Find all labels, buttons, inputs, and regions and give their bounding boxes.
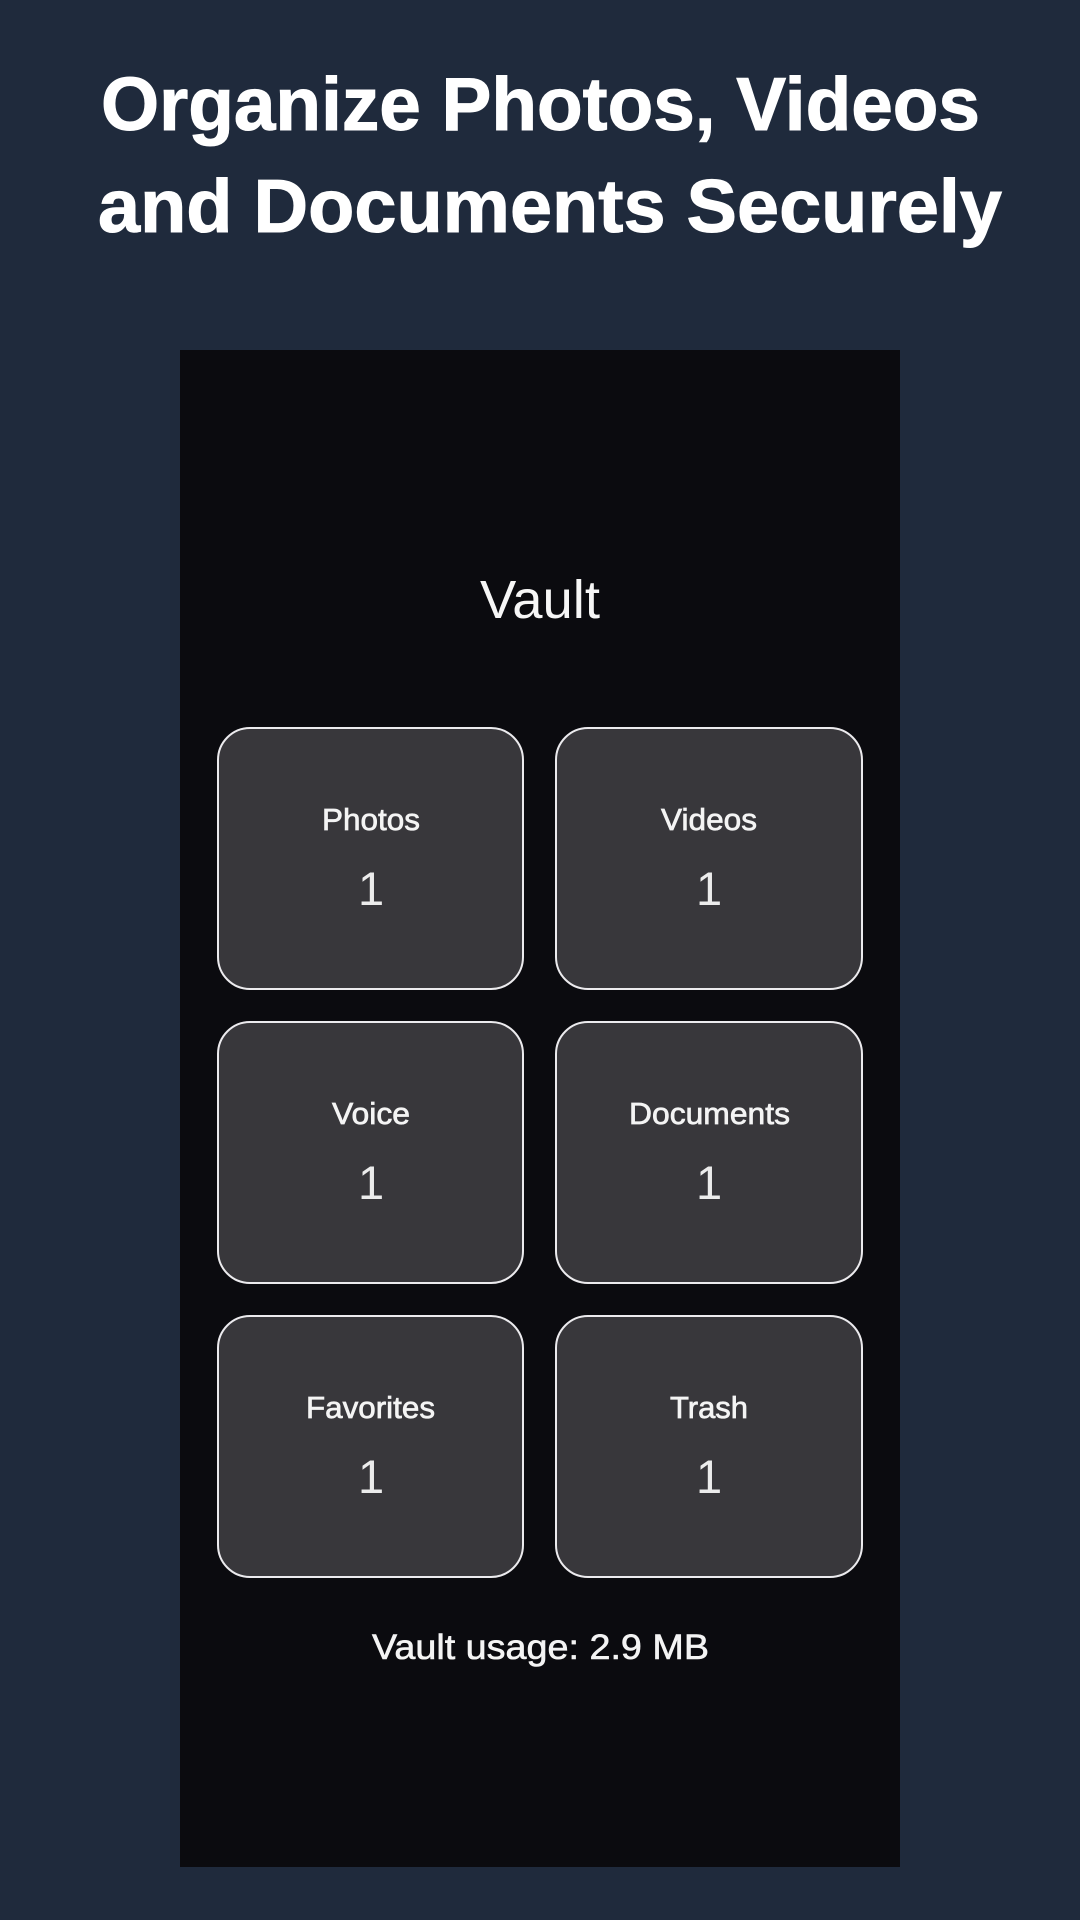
title	[98, 62, 1002, 248]
screen heading: Vault	[480, 570, 600, 630]
vault usage text: Vault usage: 2.9 MB	[372, 1628, 709, 1667]
card: Voice: Voice	[332, 1096, 410, 1131]
card: Favorites	[218, 1316, 523, 1577]
card: Voice	[218, 1022, 523, 1283]
card: Favorites: Favorites	[306, 1390, 435, 1425]
card: Trash	[556, 1316, 862, 1577]
card: Videos	[556, 728, 862, 989]
title: and Documents Securely	[98, 164, 1002, 248]
card: Trash: 1	[696, 1450, 722, 1503]
card: Documents: Documents	[629, 1096, 790, 1131]
panel: phone screen	[180, 350, 900, 1867]
card: Favorites: 1	[358, 1450, 384, 1503]
card: Documents	[556, 1022, 862, 1283]
card: Trash: Trash	[670, 1390, 748, 1425]
card: Videos: Videos	[661, 802, 757, 837]
card: Videos: 1	[696, 862, 722, 915]
card: Documents: 1	[696, 1156, 722, 1209]
card: Voice: 1	[358, 1156, 384, 1209]
title: Organize Photos, Videos	[101, 62, 980, 146]
card: Photos: Photos	[322, 802, 420, 837]
card: Photos: 1	[358, 862, 384, 915]
card: Photos	[218, 728, 523, 989]
